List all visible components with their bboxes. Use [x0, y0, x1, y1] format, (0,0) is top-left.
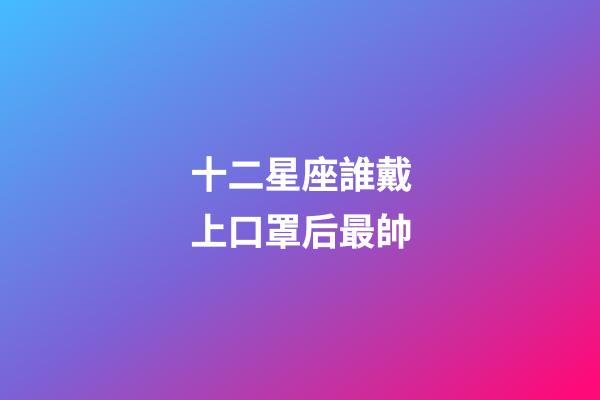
- title: 十二星座誰戴: [190, 155, 412, 196]
- title: 上口罩后最帥: [190, 212, 412, 253]
- title: [190, 155, 412, 253]
